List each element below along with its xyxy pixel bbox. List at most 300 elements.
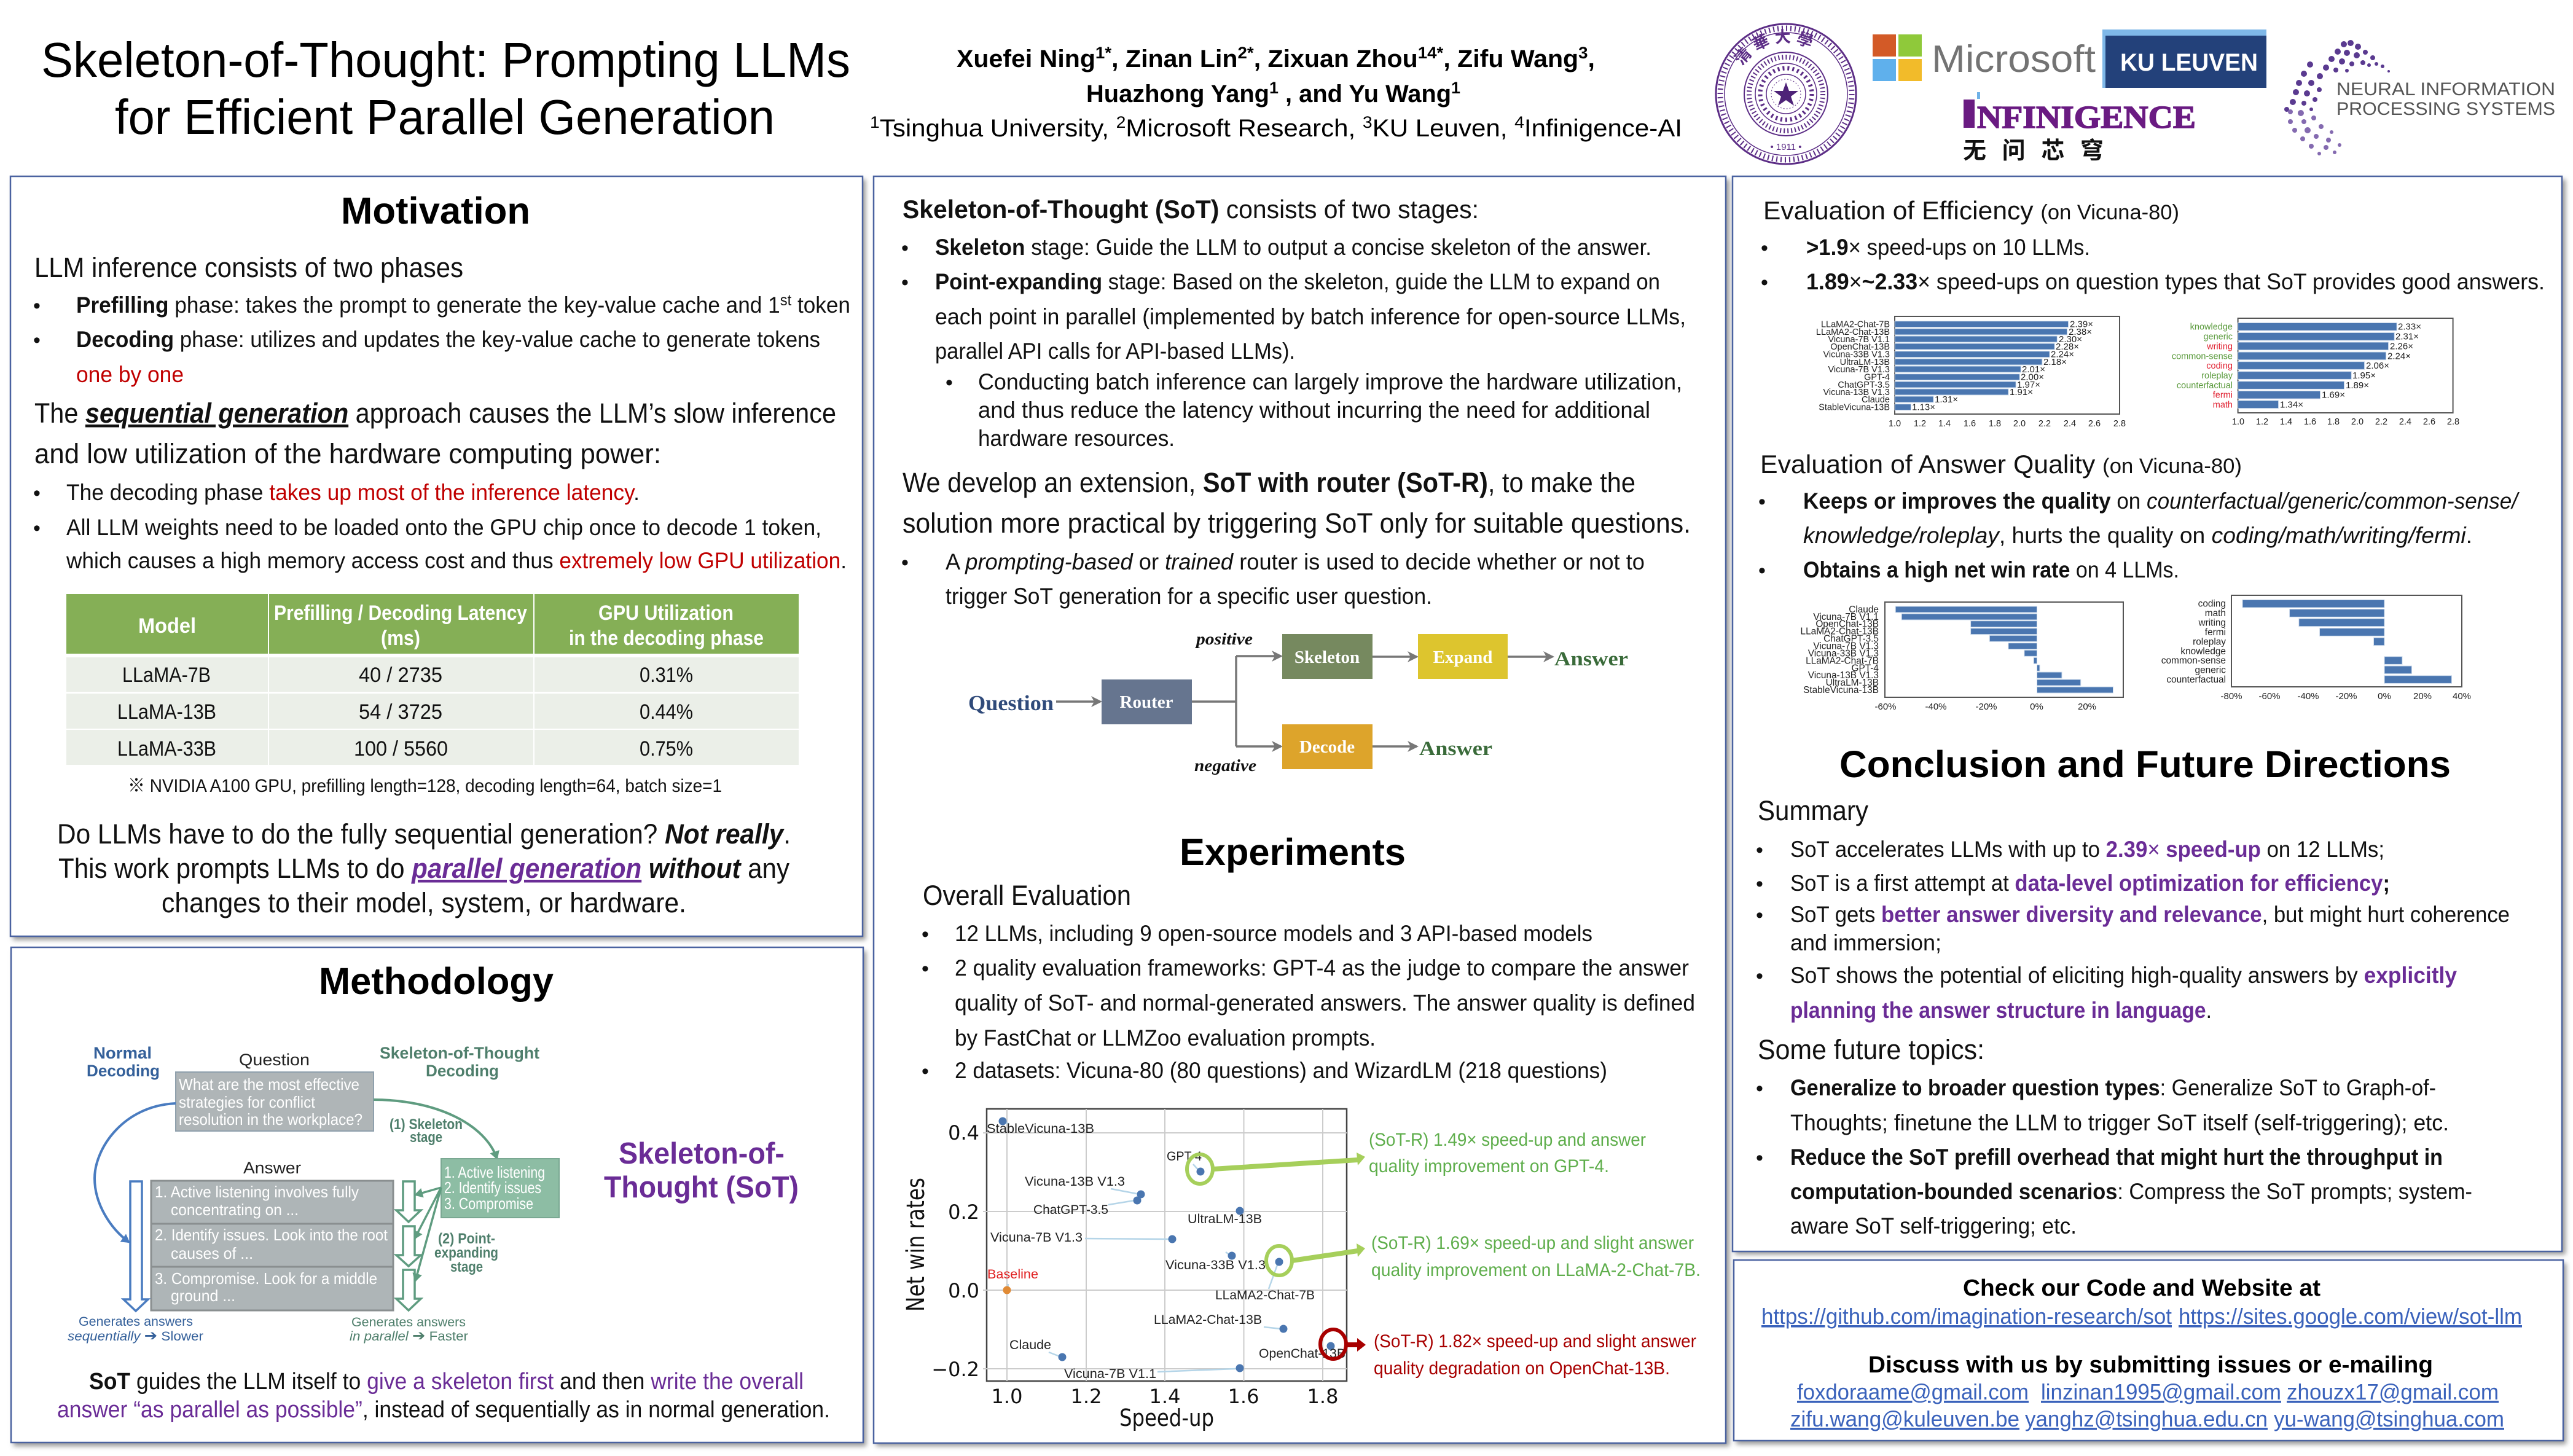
- chart: net win rate per model: Vicuna-7B V1.3: [1813, 641, 1879, 652]
- label: normal decoding: Decoding: [87, 1062, 160, 1080]
- links: e-mail addresses: foxdoraame@gmail.com: [1797, 1379, 2029, 1404]
- decode box: [1282, 724, 1373, 769]
- text block: future topics: aware SoT self-triggering; etc.: [1790, 1213, 2077, 1239]
- label: question: Question: [968, 691, 1054, 715]
- question box: What are the most effective: [179, 1075, 359, 1094]
- logo: Tsinghua University seal: [1715, 23, 1857, 165]
- authors and affiliations: , Zinan Lin: [1111, 45, 1238, 72]
- text block: summary: •: [1756, 904, 1763, 927]
- heading: Motivation: Motivation: [341, 190, 530, 232]
- label: normal decoding: Normal: [93, 1044, 152, 1062]
- chart: net win rate per question type: counterfactual: [2166, 675, 2226, 685]
- arrows: parallel generation: [396, 1181, 421, 1310]
- text block: future topics: Generalize to broader question types: Generalize SoT to Graph-of-: [1790, 1075, 2436, 1100]
- authors and affiliations: , Zifu Wang: [1443, 45, 1578, 72]
- chart: speed-up per question type: 1.34×: [2280, 399, 2303, 410]
- text block: SoT stages: •: [901, 271, 909, 294]
- caption: sequential slower: [68, 1315, 203, 1344]
- callout: GPT-4: (SoT-R) 1.49× speed-up and answer: [1369, 1130, 1646, 1150]
- chart: net win rate per model: LLaMA2-Chat-13B: [1801, 627, 1879, 637]
- text block: future topics: Thoughts; finetune the LLM to trigger SoT itself (self-triggering); etc.: [1790, 1110, 2449, 1135]
- text block: parallel generation question: This work prompts LLMs to do parallel generation without any: [58, 853, 789, 884]
- links: code and website: [1761, 1304, 2522, 1329]
- text block: overall evaluation: •: [922, 923, 929, 946]
- x axis ticks: 1.2: [1071, 1385, 1102, 1408]
- chart: net win rate per model: LLaMA2-Chat-7B: [1806, 656, 1879, 666]
- point labels: StableVicuna-13B: [987, 1122, 1094, 1136]
- title: Skeleton-of-Thought: Prompting LLMs: [41, 33, 850, 87]
- text block: SoT stages: each point in parallel (implemented by batch inference for open-source LLMs,: [935, 304, 1686, 329]
- answer box: [151, 1159, 393, 1310]
- authors and affiliations: 14*: [1418, 44, 1444, 62]
- text block: SoT stages: parallel API calls for API-based LLMs).: [935, 339, 1295, 364]
- chart: speed-up per model: ChatGPT-3.5: [1838, 380, 1890, 390]
- logo: Microsoft: Microsoft: [1932, 38, 2096, 80]
- chart: speed-up per question type: 1.6: [2304, 417, 2316, 427]
- logo: Microsoft: [1873, 34, 2096, 81]
- title: for Efficient Parallel Generation: [115, 90, 775, 144]
- label: normal decoding: [87, 1044, 160, 1080]
- text block: SoT-R extension: trigger SoT generation for a specific user question.: [946, 584, 1432, 609]
- chart: speed-up per model: [1816, 316, 2126, 429]
- chart: speed-up per model: LLaMA2-Chat-7B: [1821, 320, 1890, 330]
- panel: motivation: [10, 176, 866, 940]
- connectors: [1056, 656, 1553, 746]
- text block: parallel generation question: changes to their model, system, or hardware.: [162, 887, 686, 918]
- text block: SoT-R extension: [901, 467, 1691, 609]
- text block: summary: [1756, 795, 2510, 1023]
- authors and affiliations: 4: [1514, 113, 1524, 131]
- text block: SoT-R extension: •: [901, 551, 909, 574]
- authors and affiliations: Huazhong Yang: [1086, 80, 1270, 108]
- authors and affiliations: 1: [870, 113, 880, 131]
- chart: speed-up per question type: math: [2213, 400, 2233, 410]
- chart: speed-up per question type: 2.33×: [2398, 322, 2421, 332]
- heading: Experiments: Experiments: [1180, 831, 1406, 873]
- chart: net win rate per model: Claude: [1849, 605, 1879, 615]
- table: latency and GPU utilization: 100 / 5560: [354, 737, 448, 761]
- chart: net win rate per model: UltraLM-13B: [1826, 678, 1879, 688]
- text block: future topics: Some future topics:: [1758, 1034, 1984, 1065]
- text block: sequential generation: [33, 397, 847, 573]
- text block: two phases: •: [33, 329, 41, 352]
- point labels: Vicuna-33B V1.3: [1165, 1258, 1266, 1272]
- chart: speed-up per question type: 2.6: [2423, 417, 2435, 427]
- x axis ticks: 1.6: [1228, 1385, 1259, 1408]
- logo: Infinigence: [1963, 92, 2196, 164]
- text block: SoT summary: SoT guides the LLM itself to give a skeleton first and then write the overall: [89, 1369, 804, 1395]
- panel: methodology: [11, 947, 866, 1446]
- chart: speed-up per model: 1.0: [1889, 419, 1901, 429]
- chart: net win rate per model: Vicuna-33B V1.3: [1808, 648, 1879, 659]
- table: latency and GPU utilization: 54 / 3725: [359, 700, 442, 724]
- chart: speed-up per model: 2.30×: [2059, 334, 2082, 345]
- text block: sequential generation: The sequential generation approach causes the LLM’s slow inference: [34, 397, 836, 429]
- arrows: skeleton to points: [415, 1188, 441, 1281]
- text block: summary: •: [1756, 839, 1763, 862]
- panel: evaluation and conclusion: [1733, 176, 2566, 1254]
- text block: summary: SoT is a first attempt at data-level optimization for efficiency;: [1790, 871, 2390, 896]
- chart: speed-up per question type: 1.8: [2327, 417, 2340, 427]
- point labels: [987, 1122, 1345, 1381]
- authors and affiliations: , and Yu Wang: [1279, 80, 1451, 108]
- point labels: Claude: [1009, 1338, 1051, 1352]
- table: latency and GPU utilization: in the decoding phase: [569, 627, 764, 650]
- table: latency and GPU utilization: Model: [138, 614, 196, 638]
- text block: two phases: Decoding phase: utilizes and updates the key-value cache to generate tokens: [76, 327, 820, 352]
- table: latency and GPU utilization: LLaMA-33B: [117, 737, 216, 761]
- heading: code and website: Check our Code and Website at: [1963, 1275, 2320, 1301]
- skeleton box: 1. Active listening: [444, 1163, 545, 1181]
- answer box: 1. Active listening involves fully: [155, 1183, 359, 1201]
- answer box: causes of ...: [171, 1244, 253, 1262]
- answers: [1419, 648, 1628, 760]
- point labels: Vicuna-7B V1.1: [1064, 1367, 1156, 1381]
- text block: overall evaluation: •: [922, 957, 929, 980]
- text block: SoT stages: Conducting batch inference can largely improve the hardware utilization,: [978, 369, 1682, 394]
- chart: speed-up per question type: 2.2: [2375, 417, 2387, 427]
- branch labels: [1194, 630, 1256, 775]
- chart: speed-up per model: 2.2: [2038, 419, 2051, 429]
- text block: SoT-R extension: We develop an extension, SoT with router (SoT-R), to make the: [903, 467, 1635, 498]
- chart: speed-up per model: Vicuna-7B V1.3: [1828, 365, 1890, 375]
- text block: summary: •: [1756, 965, 1763, 988]
- point labels: Baseline: [987, 1267, 1038, 1282]
- chart: speed-up per question type: fermi: [2213, 391, 2233, 401]
- callout: OpenChat-13B: (SoT-R) 1.82× speed-up and slight answer: [1374, 1331, 1696, 1352]
- text block: evaluation of answer quality: Evaluation of Answer Quality (on Vicuna-80): [1760, 450, 2242, 479]
- skeleton box: 3. Compromise: [444, 1194, 533, 1213]
- chart: speed-up per model: 2.4: [2064, 419, 2076, 429]
- text block: SoT-R extension: A prompting-based or trained router is used to decide whether or not to: [946, 549, 1645, 574]
- text block: two phases: token: [791, 292, 850, 318]
- chart: speed-up per question type: counterfactual: [2177, 381, 2233, 391]
- label: point-expanding stage: stage: [450, 1259, 483, 1275]
- chart: speed-up per question type: 1.2: [2256, 417, 2268, 427]
- chart: speed-up per question type: 1.69×: [2322, 390, 2345, 401]
- y axis ticks: 0.4: [948, 1121, 979, 1145]
- chart: net win rate per model: Vicuna-7B V1.1: [1813, 612, 1879, 622]
- text block: SoT summary: [57, 1369, 830, 1423]
- chart: net win rate per question type: generic: [2195, 665, 2226, 675]
- text block: future topics: •: [1756, 1077, 1763, 1100]
- authors and affiliations: [870, 44, 1682, 142]
- chart: speed-up per question type: 2.06×: [2366, 361, 2389, 371]
- chart: speed-up per model: Claude: [1862, 395, 1890, 405]
- text block: parallel generation question: Do LLMs have to do the fully sequential generation? Not really.: [57, 818, 791, 850]
- caption: sequential slower: Generates answers: [79, 1315, 193, 1329]
- chart: speed-up per model: 2.0: [2013, 419, 2026, 429]
- chart: net win rate per model: 20%: [2078, 702, 2096, 712]
- x axis ticks: 1.8: [1307, 1385, 1338, 1408]
- chart: net win rate per model: 0%: [2030, 702, 2043, 712]
- table: latency and GPU utilization: 0.75%: [640, 737, 693, 761]
- authors and affiliations: 3: [1578, 44, 1588, 62]
- chart: speed-up per model: 2.39×: [2070, 319, 2093, 330]
- point labels: UltraLM-13B: [1188, 1212, 1262, 1226]
- chart: speed-up per model: 1.97×: [2017, 380, 2040, 390]
- authors and affiliations: Microsoft Research,: [1126, 115, 1363, 142]
- chart: speed-up per model: GPT-4: [1864, 373, 1890, 383]
- x axis ticks: 1.4: [1149, 1385, 1180, 1408]
- links: e-mail addresses: zifu.wang@kuleuven.be: [1790, 1406, 2019, 1431]
- text block: summary: SoT accelerates LLMs with up to 2.39× speed-up on 12 LLMs;: [1790, 837, 2384, 862]
- x axis ticks: 1.0: [992, 1385, 1022, 1408]
- callout: LLaMA-2-Chat-7B: [1266, 1233, 1701, 1280]
- chart: net win rate per model: [1801, 602, 2123, 712]
- point labels: ChatGPT-3.5: [1033, 1203, 1108, 1217]
- authors and affiliations: 3: [1363, 113, 1373, 131]
- text block: evaluation of answer quality: Keeps or improves the quality on counterfactual/generic/common-sense/: [1803, 488, 2520, 514]
- callout: OpenChat-13B: [1320, 1329, 1696, 1379]
- x axis ticks: [992, 1385, 1338, 1408]
- point labels: Vicuna-7B V1.3: [990, 1231, 1083, 1245]
- caption: parallel faster: Generates answers: [351, 1315, 466, 1329]
- label: skeleton-of-thought decoding: [380, 1044, 539, 1080]
- authors and affiliations: ,: [1588, 45, 1595, 72]
- logo: KU Leuven: [2102, 29, 2266, 88]
- chart: net win rate per question type: 0%: [2378, 691, 2391, 702]
- answer box: Answer: [243, 1159, 301, 1177]
- label: skeleton-of-thought decoding: Skeleton-of-Thought: [380, 1044, 539, 1062]
- chart: speed-up per model: 1.6: [1964, 419, 1976, 429]
- chart: speed-up per model: 2.24×: [2051, 350, 2074, 360]
- decode box: Decode: [1299, 737, 1355, 757]
- authors and affiliations: Infinigence-AI: [1524, 115, 1682, 142]
- text block: summary: SoT gets better answer diversity and relevance, but might hurt coherence: [1790, 902, 2510, 927]
- callout: OpenChat-13B: quality degradation on OpenChat-13B.: [1374, 1358, 1670, 1379]
- text block: summary: planning the answer structure in language.: [1790, 998, 2212, 1023]
- chart: speed-up per model: 2.8: [2113, 419, 2126, 429]
- label: skeleton stage: (1) Skeleton: [390, 1116, 463, 1133]
- chart: net win rate per model: -40%: [1925, 702, 1947, 712]
- text block: two phases: [33, 252, 850, 387]
- chart: speed-up per question type: common-sense: [2172, 351, 2233, 361]
- chart: net win rate per question type: roleplay: [2193, 636, 2226, 647]
- chart: speed-up per question type: 1.89×: [2346, 380, 2369, 391]
- table: latency and GPU utilization: 0.44%: [640, 700, 693, 724]
- logo: Infinigence: NFINIGENCE: [1977, 100, 2196, 135]
- links: e-mail addresses: zhouzx17@gmail.com: [2287, 1379, 2499, 1404]
- chart: net win rate per model: OpenChat-13B: [1815, 619, 1879, 630]
- caption: parallel faster: in parallel ➔ Faster: [350, 1327, 468, 1344]
- diagram: router flow: [968, 630, 1628, 775]
- authors and affiliations: 2*: [1238, 44, 1254, 62]
- chart: speed-up per question type: 2.24×: [2387, 351, 2411, 361]
- diagram: normal vs skeleton decoding: [68, 1044, 559, 1344]
- chart: net win rate per question type: -40%: [2297, 691, 2319, 702]
- label: Skeleton-of-Thought (SoT): Thought (SoT): [604, 1171, 799, 1204]
- chart: net win rate per model: Vicuna-13B V1.3: [1808, 670, 1879, 681]
- text block: evaluation of efficiency: 1.89×~2.33× speed-ups on question types that SoT provides good answers.: [1806, 269, 2545, 294]
- text block: overall evaluation: quality of SoT- and normal-generated answers. The answer quality is defined: [955, 990, 1695, 1016]
- authors and affiliations: KU Leuven,: [1373, 115, 1514, 142]
- links: e-mail addresses: yanghz@tsinghua.edu.cn: [2025, 1406, 2268, 1431]
- text block: evaluation of efficiency: >1.9× speed-ups on 10 LLMs.: [1806, 235, 2090, 260]
- chart: net win rate per question type: [2161, 595, 2471, 702]
- text block: evaluation of answer quality: •: [1758, 490, 1766, 514]
- text block: sequential generation: which causes a high memory access cost and thus extremely low GPU utilization.: [66, 548, 847, 573]
- logo: KU Leuven: KU LEUVEN: [2120, 49, 2258, 76]
- text block: SoT summary: answer “as parallel as possible”, instead of sequentially as in normal generation.: [57, 1397, 830, 1423]
- text block: SoT-R extension: solution more practical by triggering SoT only for suitable questions.: [903, 507, 1691, 539]
- heading: Methodology: Methodology: [319, 960, 554, 1002]
- chart: speed-up per question type: 2.26×: [2390, 341, 2413, 351]
- question box: resolution in the workplace?: [179, 1110, 362, 1129]
- branch labels: positive: [1195, 630, 1253, 648]
- chart: net win rate per question type: common-sense: [2161, 656, 2226, 666]
- answer box: 2. Identify issues. Look into the root: [155, 1226, 388, 1244]
- text block: two phases: •: [33, 294, 41, 318]
- chart: speed-up per model: 1.2: [1914, 419, 1926, 429]
- chart: speed-up per model: 2.6: [2088, 419, 2101, 429]
- skeleton box: Skeleton: [1294, 648, 1360, 667]
- chart: net win rate per model: -60%: [1874, 702, 1897, 712]
- text block: future topics: computation-bounded scenarios: Compress the SoT prompts; system-: [1790, 1179, 2472, 1204]
- label: skeleton stage: [390, 1116, 463, 1146]
- chart: speed-up per question type: 1.0: [2232, 417, 2244, 427]
- text block: overall evaluation: by FastChat or LLMZoo evaluation prompts.: [955, 1025, 1376, 1051]
- y axis ticks: 0.0: [948, 1279, 979, 1302]
- text block: summary: and immersion;: [1790, 930, 1941, 955]
- chart: speed-up per model: Vicuna-13B V1.3: [1823, 388, 1890, 397]
- chart: net win rate per model: -20%: [1975, 702, 1997, 712]
- text block: SoT stages: •: [946, 371, 953, 394]
- logo: Tsinghua University seal: • 1911 •: [1770, 142, 1802, 152]
- links: code and website: https://sites.google.com/view/sot-llm: [2179, 1304, 2522, 1329]
- chart: speed-up per question type: generic: [2203, 332, 2233, 342]
- authors and affiliations: , Zixuan Zhou: [1254, 45, 1418, 72]
- text block: SoT stages: hardware resources.: [978, 426, 1175, 451]
- router box: [1102, 679, 1192, 724]
- text block: two phases: st: [780, 292, 791, 309]
- text block: sequential generation: and low utilization of the hardware computing power:: [34, 438, 661, 469]
- chart: net win rate per question type: fermi: [2205, 627, 2226, 638]
- skeleton box: 2. Identify issues: [444, 1178, 541, 1197]
- arrow: sequential generation: [123, 1181, 148, 1311]
- text block: SoT stages: and thus reduce the latency without incurring the need for additional: [978, 397, 1650, 423]
- text block: evaluation of efficiency: •: [1761, 271, 1768, 294]
- expand box: Expand: [1433, 648, 1492, 667]
- chart: speed-up per model: StableVicuna-13B: [1819, 403, 1890, 413]
- text block: summary: •: [1756, 872, 1763, 896]
- chart: speed-up per question type: 2.4: [2399, 417, 2411, 427]
- title: [41, 33, 850, 144]
- links: e-mail addresses: yu-wang@tsinghua.com: [2274, 1406, 2504, 1431]
- label: skeleton stage: stage: [410, 1129, 442, 1146]
- skeleton box: [1282, 634, 1373, 679]
- chart: net win rate per question type: writing: [2198, 617, 2226, 628]
- text block: evaluation of efficiency: •: [1761, 237, 1768, 260]
- table: latency and GPU utilization: LLaMA-7B: [122, 663, 211, 687]
- chart: speed-up per model: LLaMA2-Chat-13B: [1816, 327, 1890, 337]
- question box: strategies for conflict: [179, 1093, 316, 1111]
- answers: Answer: [1554, 648, 1628, 670]
- authors and affiliations: 1: [1269, 79, 1279, 97]
- chart: speed-up per model: Vicuna-7B V1.1: [1828, 335, 1890, 345]
- text block: overall evaluation: Overall Evaluation: [923, 880, 1131, 911]
- table: latency and GPU utilization: 40 / 2735: [359, 663, 442, 687]
- logo: NeurIPS: PROCESSING SYSTEMS: [2336, 99, 2555, 119]
- text block: summary: SoT shows the potential of eliciting high-quality answers by explicitly: [1790, 963, 2457, 988]
- text block: sequential generation: The decoding phase takes up most of the inference latency.: [66, 480, 640, 505]
- text block: evaluation of efficiency: [1761, 196, 2545, 294]
- callout: GPT-4: quality improvement on GPT-4.: [1369, 1156, 1609, 1176]
- links: e-mail addresses: linzinan1995@gmail.com: [2041, 1379, 2281, 1404]
- chart: speed-up per model: 2.01×: [2022, 364, 2045, 375]
- chart: speed-up per model: 2.00×: [2021, 372, 2044, 383]
- callout: LLaMA-2-Chat-7B: (SoT-R) 1.69× speed-up and slight answer: [1371, 1233, 1694, 1253]
- text block: evaluation of answer quality: knowledge/roleplay, hurts the quality on coding/math/writing/fermi.: [1803, 523, 2472, 548]
- authors and affiliations: Tsinghua University,: [880, 115, 1116, 142]
- chart: speed-up per model: 2.18×: [2043, 357, 2067, 367]
- point labels: OpenChat-13B: [1259, 1347, 1345, 1361]
- point labels: GPT-4: [1167, 1149, 1202, 1164]
- text block: parallel generation question: [57, 818, 791, 918]
- chart: speed-up per question type: [2172, 318, 2459, 427]
- chart: net win rate per question type: -20%: [2335, 691, 2357, 702]
- label: Skeleton-of-Thought (SoT): [604, 1137, 799, 1204]
- panel: code and contact: [1734, 1260, 2566, 1444]
- point labels: LLaMA2-Chat-7B: [1215, 1288, 1315, 1302]
- router box: Router: [1120, 692, 1173, 712]
- table: latency and GPU utilization: (ms): [381, 627, 420, 650]
- chart: net win rate per model: GPT-4: [1852, 663, 1879, 673]
- panel: SoT and experiments: [874, 176, 1729, 1446]
- table: latency and GPU utilization: 0.31%: [640, 663, 693, 687]
- chart: speed-up per model: 2.28×: [2056, 342, 2079, 352]
- table: latency and GPU utilization: GPU Utilization: [598, 601, 734, 625]
- text block: overall evaluation: [922, 880, 1695, 1083]
- chart: speed-up per model: OpenChat-13B: [1830, 342, 1890, 352]
- heading: discuss: Discuss with us by submitting issues or e-mailing: [1868, 1352, 2433, 1378]
- authors and affiliations: 1: [1451, 79, 1460, 97]
- chart: speed-up per question type: 2.0: [2351, 417, 2363, 427]
- text block: future topics: •: [1756, 1146, 1763, 1170]
- skeleton box: [441, 1159, 559, 1218]
- text block: SoT stages: [901, 195, 1686, 451]
- chart: speed-up per model: 1.13×: [1912, 402, 1935, 413]
- chart: net win rate per question type: -80%: [2220, 691, 2242, 702]
- y axis ticks: [931, 1121, 979, 1381]
- logo: NeurIPS: NEURAL INFORMATION: [2336, 79, 2555, 100]
- links: e-mail addresses: [1790, 1379, 2504, 1431]
- text block: two phases: LLM inference consists of two phases: [34, 252, 463, 283]
- chart: net win rate per question type: knowledge: [2180, 646, 2226, 657]
- label: point-expanding stage: expanding: [434, 1245, 498, 1261]
- text block: overall evaluation: 2 datasets: Vicuna-80 (80 questions) and WizardLM (218 questions): [955, 1058, 1607, 1083]
- question box: Question: [239, 1051, 310, 1069]
- table: latency and GPU utilization: Prefilling / Decoding Latency: [274, 601, 527, 625]
- caption: parallel faster: [350, 1315, 468, 1344]
- chart: speed-up per model: 1.31×: [1935, 394, 1958, 405]
- answer box: 3. Compromise. Look for a middle: [155, 1269, 377, 1288]
- chart: speed-up vs net win rates scatter: [902, 1109, 1347, 1431]
- chart: net win rate per model: ChatGPT-3.5: [1823, 633, 1879, 644]
- point labels: Vicuna-13B V1.3: [1025, 1175, 1125, 1189]
- chart: speed-up per question type: 1.95×: [2352, 370, 2376, 381]
- axis label: speed-up: Speed-up: [1119, 1404, 1214, 1431]
- text block: sequential generation: All LLM weights need to be loaded onto the GPU chip once to decode 1 token,: [66, 515, 821, 540]
- text block: overall evaluation: •: [922, 1060, 929, 1083]
- logo: Tsinghua University seal: 清 華 大 學: [1734, 29, 1814, 65]
- text block: evaluation of answer quality: [1758, 450, 2520, 582]
- label: point-expanding stage: [434, 1231, 498, 1275]
- answer box: ground ...: [171, 1286, 235, 1305]
- label: point-expanding stage: (2) Point-: [438, 1231, 495, 1247]
- point labels: LLaMA2-Chat-13B: [1154, 1313, 1262, 1327]
- label: skeleton-of-thought decoding: Decoding: [426, 1062, 499, 1080]
